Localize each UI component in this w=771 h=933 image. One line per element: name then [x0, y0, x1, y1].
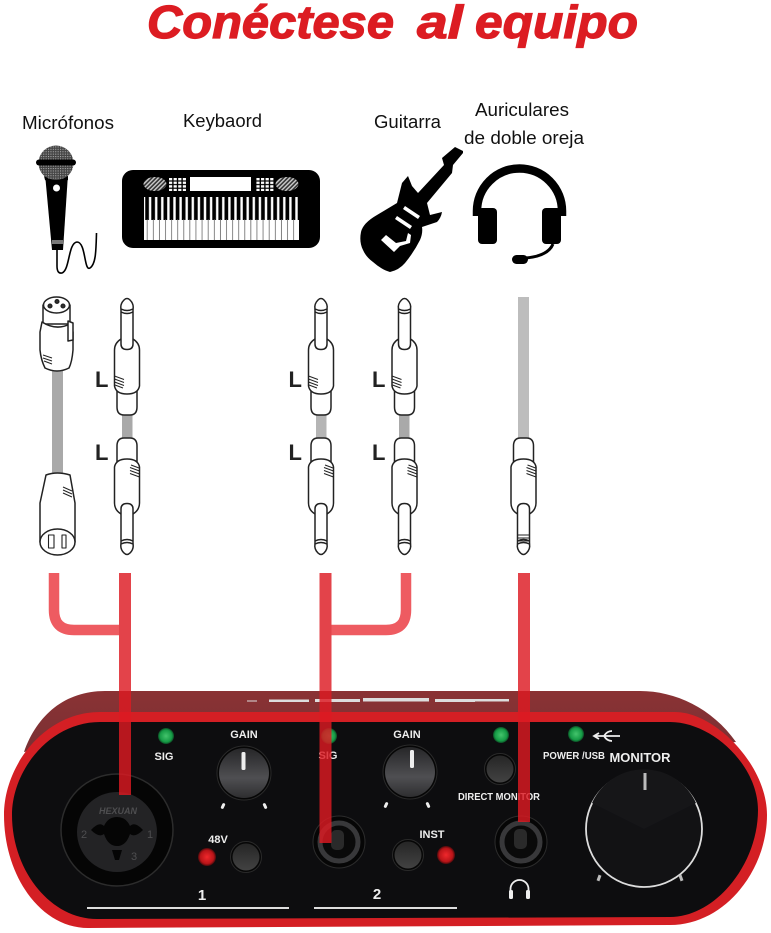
cable: guitar jack cable 1: L	[288, 367, 302, 392]
cable: headset jack cable	[511, 297, 536, 554]
direct monitor and headphone output	[458, 727, 547, 899]
cable: XLR microphone cable	[40, 297, 75, 555]
black front panel	[12, 722, 758, 919]
label: Auriculares de doble oreja: Auriculares	[475, 100, 569, 120]
label: Keybaord: Keybaord	[183, 111, 262, 131]
connection line: XLR to input 1	[54, 573, 119, 630]
logo on top	[247, 698, 509, 702]
connection line: jack to input 1	[119, 573, 131, 795]
icon: keyboard	[122, 170, 320, 248]
icon: headset	[477, 168, 562, 264]
label: Guitarra: Guitarra	[374, 112, 442, 132]
top surface	[24, 691, 736, 752]
channel 1 controls: 48V	[208, 834, 228, 846]
combo input jack 1: 1	[147, 829, 153, 841]
cable: keyboard jack cable	[95, 298, 140, 554]
channel 2 controls: GAIN	[393, 729, 421, 741]
combo input jack 1: 3	[131, 851, 137, 863]
connection line: jack to input 2	[320, 573, 332, 843]
channel 2 controls: SIG	[319, 750, 337, 762]
label: Auriculares de doble oreja: de doble oreja	[464, 128, 585, 148]
label: Auriculares de doble oreja	[464, 100, 585, 148]
title	[147, 0, 638, 48]
icon: microphone	[36, 146, 96, 273]
cable: keyboard jack cable: L	[95, 367, 108, 392]
label: Micrófonos: Micrófonos	[22, 113, 114, 133]
channel 2 controls: INST	[419, 829, 445, 841]
channel 1 controls: SIG	[155, 751, 173, 763]
channel 2 controls	[313, 728, 457, 909]
channel 1 controls: GAIN	[230, 729, 258, 741]
cable: guitar jack cable 1: L	[288, 440, 302, 465]
red front frame	[4, 712, 767, 928]
cable: guitar jack cable 2	[372, 298, 417, 554]
icon: guitar	[360, 147, 463, 272]
channel 1 controls	[87, 728, 289, 909]
combo input jack 1: HEXUAN	[99, 806, 137, 816]
combo input jack 1	[61, 774, 173, 886]
power and monitor section: POWER /USB	[543, 750, 605, 762]
power and monitor section: MONITOR	[610, 750, 671, 765]
cable: guitar jack cable 2: L	[372, 367, 385, 392]
channel 1 controls: 1	[198, 887, 206, 904]
combo input jack 1: 2	[81, 829, 87, 841]
cable: guitar jack cable 1	[288, 298, 334, 554]
audio interface device	[4, 691, 767, 928]
cable: keyboard jack cable: L	[95, 440, 108, 465]
cable: guitar jack cable 2: L	[372, 440, 385, 465]
channel 2 controls: 2	[373, 886, 381, 903]
connection line: guitar to input 2	[332, 573, 406, 630]
direct monitor and headphone output: DIRECT MONITOR	[458, 792, 541, 803]
power and monitor section	[543, 726, 702, 887]
connection line: headset to output	[518, 573, 530, 822]
